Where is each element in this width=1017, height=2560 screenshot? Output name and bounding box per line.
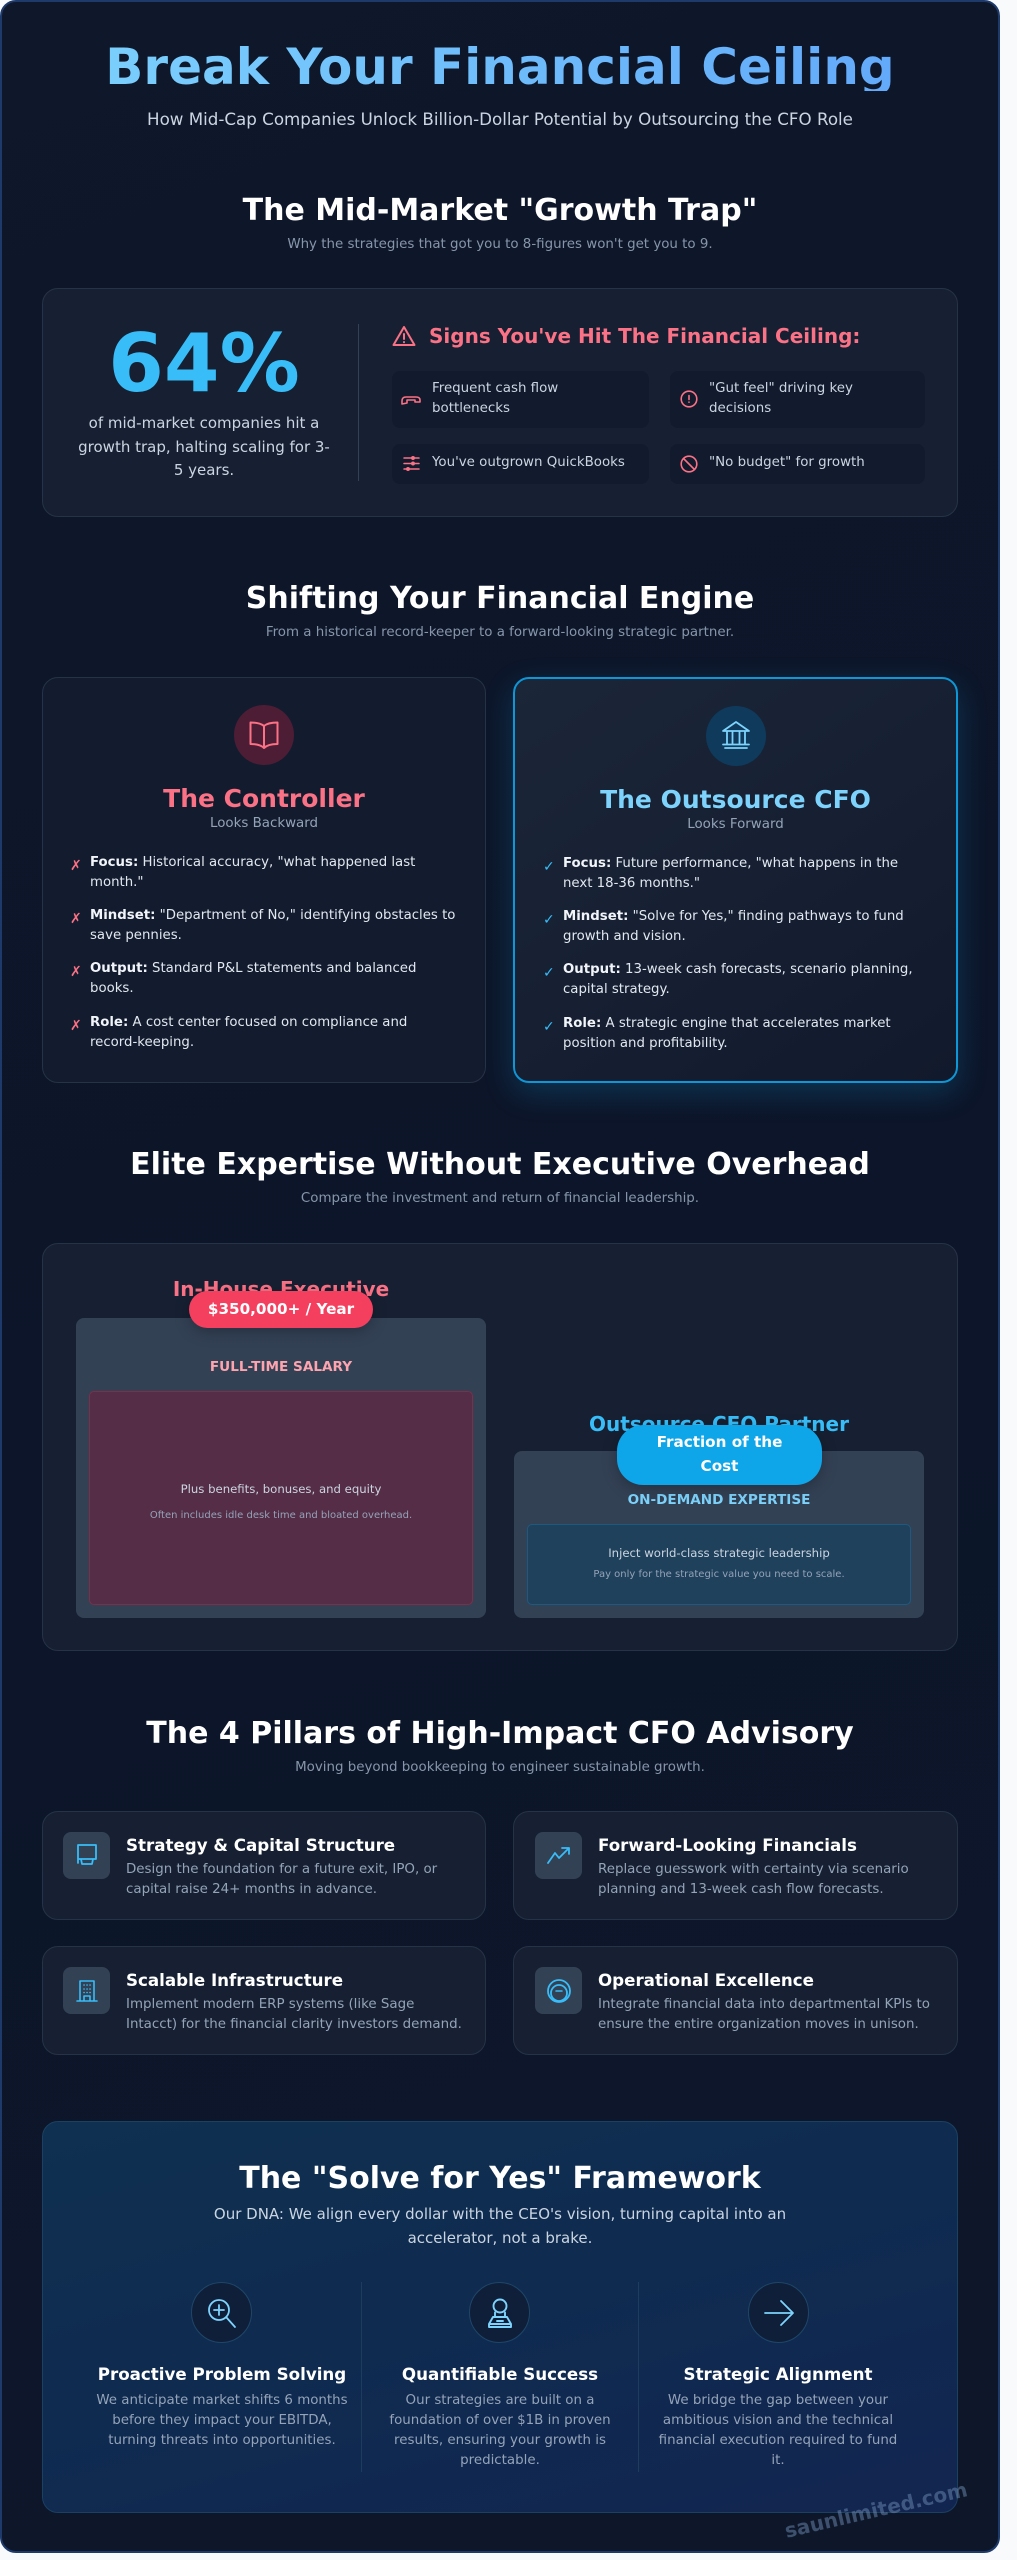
column text: before they impact your EBITDA,: [112, 2413, 332, 2428]
text: decisions: [709, 401, 771, 416]
pillar description: ensure the entire organization moves in unison.: [598, 2017, 919, 2032]
framework title: The "Solve for Yes" Framework: [239, 2161, 761, 2196]
column text: results, ensuring your growth is: [394, 2433, 606, 2448]
pillar description: Implement modern ERP systems (like Sage: [126, 1997, 414, 2012]
icon: person with laptop: [469, 2282, 530, 2343]
stat caption: [78, 414, 330, 479]
icon: sliders: [403, 456, 420, 471]
heading: pillars: The 4 Pillars of High-Impact CFO Advisory: [146, 1716, 854, 1751]
subheading: pillars: Moving beyond bookkeeping to engineer sustainable growth.: [295, 1760, 705, 1775]
icon: building: [63, 1967, 110, 2014]
row: next 18-36 months.": [563, 876, 700, 891]
pill: price: [189, 1291, 373, 1328]
row: [90, 961, 416, 996]
panel: scalable: [42, 1946, 486, 2055]
inner block: [89, 1391, 473, 1605]
row: Focus: Future performance, "what happens in the: [563, 856, 898, 871]
mark: ✗: [70, 911, 82, 927]
watermark: saunlimited.com: [782, 2477, 970, 2543]
row: [563, 909, 904, 944]
pillar description: Intacct) for the financial clarity investors demand.: [126, 2017, 462, 2032]
bar caption: FULL-TIME SALARY: [210, 1359, 352, 1375]
pillar description: planning and 13-week cash flow forecasts.: [598, 1882, 884, 1897]
pillar description: Design the foundation for a future exit, IPO, or: [126, 1862, 437, 1877]
row: [90, 1015, 407, 1050]
icon: operations: [535, 1967, 582, 2014]
subheading: financial engine: From a historical record-keeper to a forward-looking strategic partner.: [266, 625, 734, 640]
outsource title: The Outsource CFO: [600, 785, 871, 814]
row: Role: A cost center focused on compliance and: [90, 1015, 407, 1030]
sign: gut feel: [670, 371, 925, 428]
pillar description: Replace guesswork with certainty via scenario: [598, 1862, 909, 1877]
divider: [638, 2282, 639, 2472]
icon: strategy: [63, 1832, 110, 1879]
row: [90, 908, 455, 943]
pillar description: Integrate financial data into departmental KPIs to: [598, 1997, 930, 2012]
inner text: Inject world-class strategic leadership: [608, 1546, 830, 1560]
row: record-keeping.: [90, 1035, 194, 1050]
text: [709, 381, 853, 416]
bar caption: ON-DEMAND EXPERTISE: [628, 1492, 810, 1508]
panel: solve for yes framework: [42, 2121, 958, 2513]
row: [563, 962, 913, 997]
row: [90, 855, 416, 890]
heading: growth trap: The Mid-Market "Growth Trap": [243, 193, 757, 228]
pillar title: Scalable Infrastructure: [126, 1970, 343, 1990]
row: Role: A strategic engine that accelerates market: [563, 1016, 891, 1031]
mark: ✓: [543, 1019, 555, 1035]
pill: fraction: Fraction of the: [657, 1433, 782, 1451]
stat caption: growth trap, halting scaling for 3-: [78, 438, 330, 456]
column: quantifiable: [389, 2282, 611, 2468]
pillar description: [126, 1862, 438, 1897]
pill: price: $350,000+ / Year: [208, 1300, 354, 1318]
column text: We anticipate market shifts 6 months: [96, 2393, 348, 2408]
column text: financial execution required to fund: [659, 2433, 897, 2448]
column text: foundation of over $1B in proven: [389, 2413, 611, 2428]
list: outsource: [543, 856, 913, 1051]
row: Output: 13-week cash forecasts, scenario planning,: [563, 962, 913, 977]
sign: no budget: [670, 444, 925, 484]
subtitle: How Mid-Cap Companies Unlock Billion-Dollar Potential by Outsourcing the CFO Role: [147, 109, 853, 129]
column heading: Proactive Problem Solving: [98, 2364, 346, 2384]
text: bottlenecks: [432, 401, 510, 416]
pillar description: [126, 1997, 462, 2032]
panel: the outsource cfo: [513, 677, 958, 1083]
column text: [389, 2393, 611, 2468]
row: growth and vision.: [563, 929, 686, 944]
column text: predictable.: [460, 2453, 540, 2468]
mark: ✓: [543, 912, 555, 928]
pillar description: capital raise 24+ months in advance.: [126, 1882, 377, 1897]
pill: fraction: [617, 1425, 822, 1485]
mark: ✗: [70, 1018, 82, 1034]
pill: fraction: Cost: [701, 1456, 738, 1474]
row: Mindset: "Solve for Yes," finding pathways to fund: [563, 909, 904, 924]
framework intro: accelerator, not a brake.: [408, 2228, 592, 2246]
icon: warning: [392, 326, 416, 346]
pillar title: Forward-Looking Financials: [598, 1835, 857, 1855]
icon: magnifier: [191, 2282, 252, 2343]
mark: ✗: [70, 858, 82, 874]
inner block: [527, 1524, 911, 1605]
text: [432, 381, 558, 416]
column heading: Quantifiable Success: [402, 2364, 598, 2384]
list: controller: [70, 855, 455, 1050]
mark: ✗: [70, 964, 82, 980]
text: You've outgrown QuickBooks: [432, 455, 625, 470]
column text: turning threats into opportunities.: [108, 2433, 336, 2448]
pillar title: Operational Excellence: [598, 1970, 814, 1990]
controller subtitle: Looks Backward: [210, 816, 318, 831]
mark: ✓: [543, 859, 555, 875]
outsource subtitle: Looks Forward: [687, 817, 784, 832]
signs heading: Signs You've Hit The Financial Ceiling:: [429, 324, 860, 348]
row: save pennies.: [90, 928, 182, 943]
icon: arrow right: [748, 2282, 809, 2343]
stat caption: of mid-market companies hit a: [89, 414, 319, 432]
framework intro: [214, 2205, 786, 2246]
pillar description: [598, 1862, 909, 1897]
icon: bank: [706, 706, 766, 766]
subheading: growth trap: Why the strategies that got you to 8-figures won't get you to 9.: [287, 237, 713, 252]
row: Focus: Historical accuracy, "what happened last: [90, 855, 415, 870]
inner note: Pay only for the strategic value you need to scale.: [593, 1569, 845, 1580]
row: Output: Standard P&L statements and balanced: [90, 961, 416, 976]
inner text: Plus benefits, bonuses, and equity: [181, 1482, 381, 1496]
sign: quickbooks: [392, 444, 649, 484]
column text: [658, 2393, 897, 2468]
icon: book: [234, 705, 294, 765]
panel: the controller: [42, 677, 486, 1083]
icon: alert circle: [680, 390, 698, 408]
heading: elite expertise: Elite Expertise Without Executive Overhead: [130, 1147, 870, 1182]
text: "No budget" for growth: [709, 455, 865, 470]
label: outsource: Outsource CFO Partner: [589, 1412, 849, 1436]
row: Mindset: "Department of No," identifying obstacles to: [90, 908, 455, 923]
row: position and profitability.: [563, 1036, 728, 1051]
title: Break Your Financial Ceiling: [105, 38, 895, 96]
sign: cash flow: [392, 371, 649, 428]
column text: Our strategies are built on a: [406, 2393, 594, 2408]
heading: financial engine: Shifting Your Financial Engine: [246, 581, 754, 616]
row: [563, 856, 898, 891]
text: Frequent cash flow: [432, 381, 558, 396]
panel: growth trap: [42, 288, 958, 517]
icon: phone: [401, 396, 421, 405]
icon: prohibited: [680, 455, 698, 473]
panel: forward-looking: [513, 1811, 958, 1920]
stat caption: 5 years.: [174, 461, 234, 479]
label: in-house: In-House Executive: [173, 1277, 389, 1301]
big stat: 64%: [108, 317, 300, 410]
row: month.": [90, 875, 144, 890]
row: capital strategy.: [563, 982, 670, 997]
row: [563, 1016, 891, 1051]
column text: We bridge the gap between your: [668, 2393, 888, 2408]
panel: cost comparison: [42, 1243, 958, 1651]
column: proactive: [96, 2282, 348, 2448]
icon: trend up: [535, 1832, 582, 1879]
inner note: Often includes idle desk time and bloated overhead.: [150, 1510, 412, 1521]
divider: [361, 2282, 362, 2472]
pillar description: [598, 1997, 930, 2032]
column text: ambitious vision and the technical: [663, 2413, 893, 2428]
controller title: The Controller: [163, 784, 365, 813]
column text: [96, 2393, 348, 2448]
bar: outsource: [514, 1451, 924, 1618]
text: "Gut feel" driving key: [709, 381, 853, 396]
row: books.: [90, 981, 134, 996]
panel: operational: [513, 1946, 958, 2055]
framework intro: Our DNA: We align every dollar with the CEO's vision, turning capital into an: [214, 2205, 786, 2223]
divider: [358, 324, 359, 481]
mark: ✓: [543, 965, 555, 981]
pillar title: Strategy & Capital Structure: [126, 1835, 395, 1855]
bar: in-house: [76, 1318, 486, 1618]
panel: strategy: [42, 1811, 486, 1920]
column text: it.: [771, 2453, 785, 2468]
column: alignment: [658, 2282, 897, 2468]
column heading: Strategic Alignment: [684, 2364, 872, 2384]
subheading: elite expertise: Compare the investment and return of financial leadership.: [301, 1191, 699, 1206]
